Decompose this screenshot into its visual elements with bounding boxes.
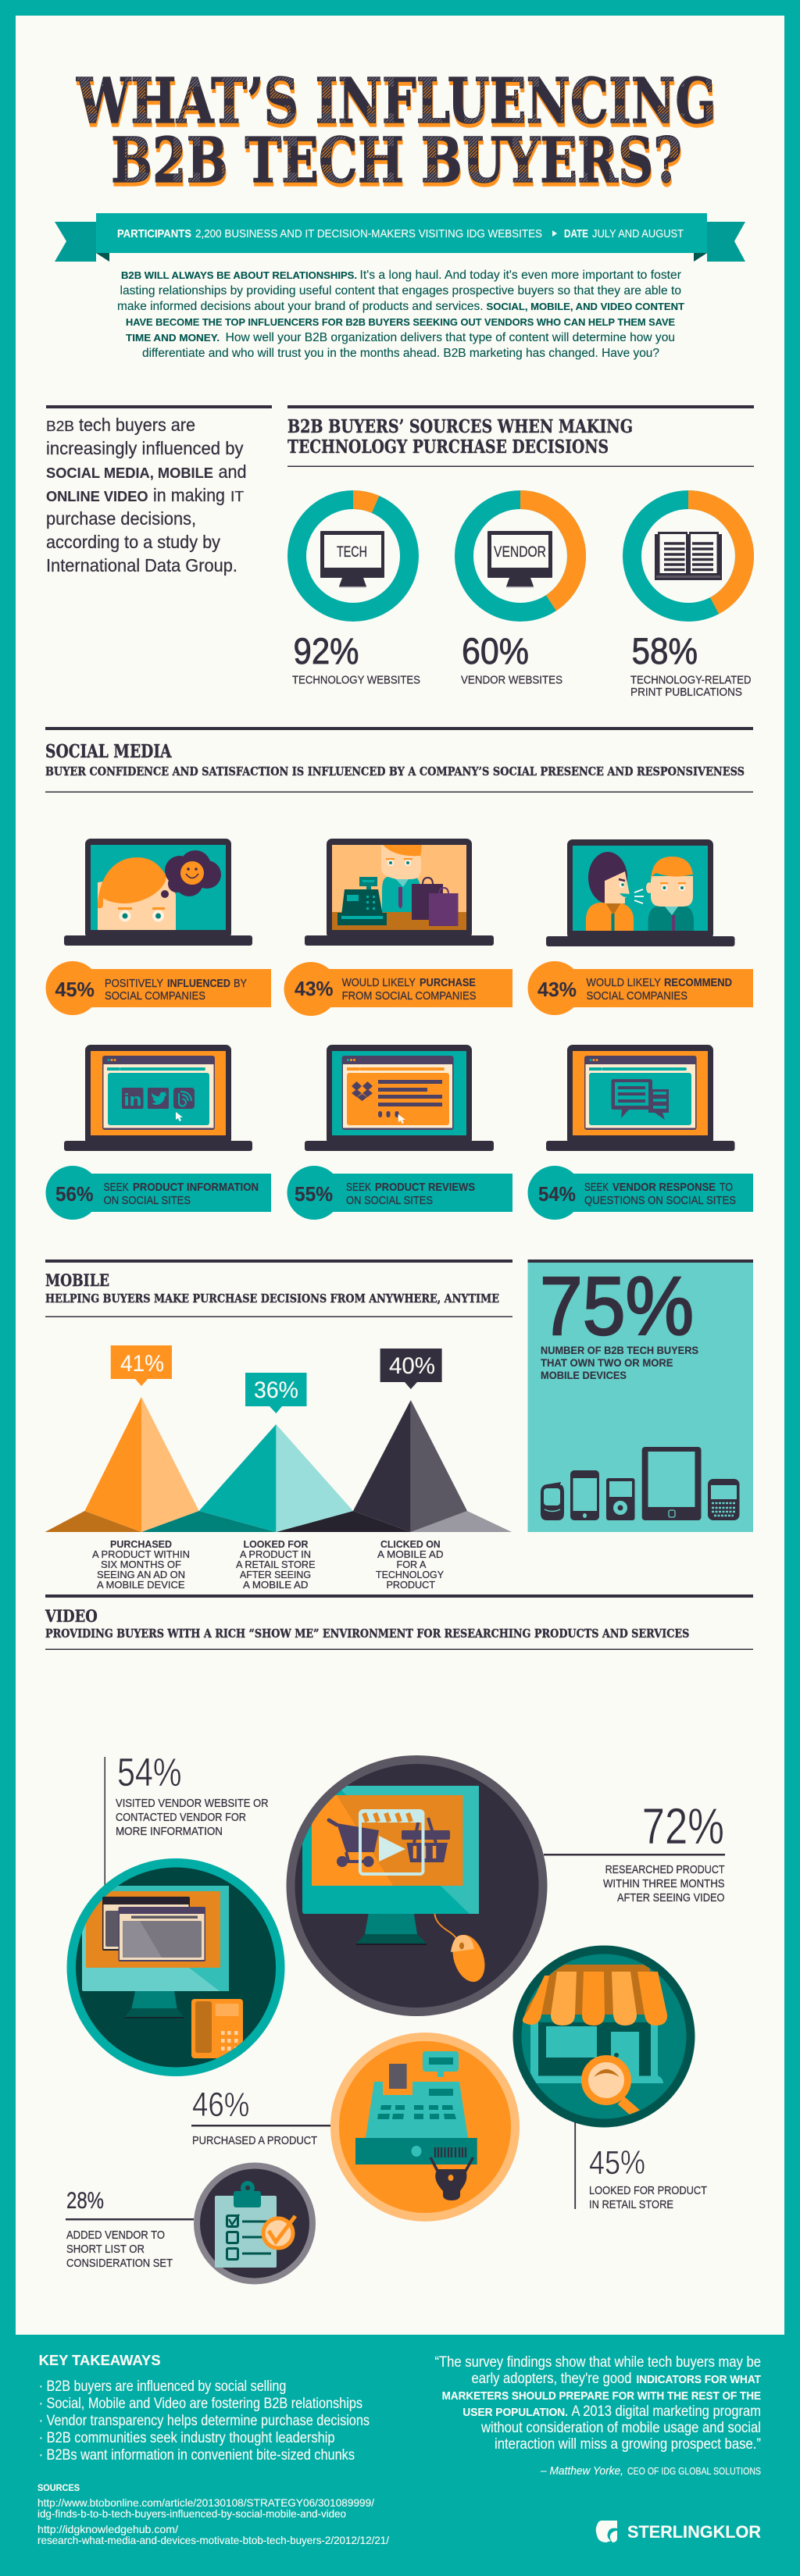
text block: sources — [38, 2482, 389, 2546]
rule: intro column — [46, 405, 272, 408]
icon: open book — [655, 532, 722, 580]
stat bar: 55%: ON SOCIAL SITES — [346, 1194, 433, 1207]
rule: sources column — [288, 405, 754, 408]
stat bar: 45%: POSITIVELY — [105, 977, 163, 990]
callout: 40%: 40% — [389, 1353, 435, 1379]
intro paragraph: lasting relationships by providing useful content that engages prospective buyers so that they are able to — [120, 284, 681, 298]
label: purchased: A MOBILE DEVICE — [97, 1579, 185, 1591]
circle: retail store — [512, 1946, 695, 2127]
panel: key takeaways: · B2Bs want information in convenient bite-sized chunks — [39, 2446, 355, 2464]
callout: quote: MARKETERS SHOULD PREPARE FOR WITH THE REST OF THE — [442, 2389, 761, 2403]
leader line: 72% — [544, 1854, 725, 1855]
circle: video monitor — [286, 1755, 547, 2016]
panel: key takeaways: KEY TAKEAWAYS — [39, 2353, 161, 2368]
label: looked for: A MOBILE AD — [243, 1579, 308, 1591]
icon: video window — [360, 1811, 423, 1874]
icon: keyboard phone — [708, 1479, 739, 1520]
panel: 75% mobile devices: NUMBER OF B2B TECH BUYERS — [541, 1345, 698, 1356]
stat bar: 43% recommend — [528, 961, 753, 1015]
icon: awning — [523, 1972, 667, 2026]
stat: 92%: 92% — [294, 630, 359, 672]
label: clicked on: A MOBILE AD — [377, 1548, 444, 1560]
text block: study summary: SOCIAL MEDIA, MOBILE — [46, 465, 213, 481]
stat bar: 56%: ON SOCIAL SITES — [104, 1194, 191, 1207]
icon: barcode scanner — [430, 2157, 473, 2200]
stat: 58% — [630, 630, 752, 699]
icon: monitor tech — [320, 531, 384, 587]
callout: 36%: 36% — [254, 1377, 298, 1403]
callout: quote: interaction will miss a growing prospect base.” — [495, 2436, 761, 2453]
text block: study summary — [46, 415, 247, 575]
stat bar: 43% purchase: FROM SOCIAL COMPANIES — [342, 989, 477, 1003]
stat bar: 54%: TO — [720, 1181, 733, 1194]
stat: 46%: 46% — [192, 2086, 249, 2124]
icon: tablet — [642, 1447, 702, 1520]
label: purchased — [92, 1538, 190, 1591]
stat bar: 54%: QUESTIONS ON SOCIAL SITES — [584, 1194, 736, 1207]
circle: vendor monitor and phone — [67, 1858, 284, 2076]
text block: study summary: tech buyers are — [79, 415, 195, 435]
stat bar: 43% recommend: 43% — [538, 978, 577, 1001]
text block: study summary: increasingly influenced by — [46, 438, 244, 458]
label: looked for: A RETAIL STORE — [236, 1559, 316, 1570]
heading: sources — [288, 416, 633, 458]
icon: shopping basket — [402, 1818, 450, 1862]
stat: 45%: IN RETAIL STORE — [589, 2198, 673, 2211]
icon: cursor — [398, 1114, 405, 1124]
text block: sources: idg-finds-b-to-b-tech-buyers-influenced-by-social-mobile-and-video — [38, 2507, 346, 2520]
callout: 41%: 41% — [120, 1351, 164, 1377]
icon: cursor — [176, 1112, 183, 1121]
icon: monitor tech: TECH — [337, 544, 367, 561]
text block: sources: SOURCES — [38, 2482, 80, 2493]
heading: mobile: MOBILE — [45, 1270, 109, 1290]
stat bar: 43% purchase — [284, 962, 512, 1016]
icon: monitor vendor: VENDOR — [494, 544, 546, 561]
ribbon banner: participants and date: PARTICIPANTS — [117, 227, 191, 240]
stat bar: 45%: 45% — [55, 978, 95, 1001]
label: looked for: AFTER SEEING — [240, 1569, 311, 1580]
stat: 72%: 72% — [642, 1797, 724, 1855]
intro paragraph: B2B WILL ALWAYS BE ABOUT RELATIONSHIPS. — [121, 269, 357, 281]
label: purchased: SEEING AN AD ON — [97, 1569, 185, 1580]
label: clicked on — [376, 1538, 444, 1591]
panel: 75% mobile devices — [528, 1260, 753, 1532]
laptop: chat browser — [546, 1045, 734, 1151]
stat: 72%: WITHIN THREE MONTHS — [603, 1877, 725, 1890]
callout: quote: early adopters, they're good — [472, 2371, 631, 2387]
icon: shopping cart — [329, 1820, 379, 1867]
heading: mobile — [45, 1270, 499, 1306]
laptop: social icons browser — [64, 1045, 252, 1151]
callout: 40% — [380, 1349, 442, 1389]
leader line: 46% — [191, 2125, 330, 2127]
heading: video: PROVIDING BUYERS WITH A RICH “SHOW ME” ENVIRONMENT FOR RESEARCHING PRODUCTS AND SERVICES — [45, 1626, 689, 1641]
icon: dropbox — [352, 1081, 373, 1101]
panel: key takeaways: · B2B communities seek industry thought leadership — [39, 2429, 335, 2446]
laptop: conversation — [546, 839, 734, 946]
callout: quote: “The survey findings show that while tech buyers may be — [434, 2354, 761, 2371]
intro paragraph: TIME AND MONEY. — [126, 332, 220, 344]
heading: sources: B2B BUYERS’ SOURCES WHEN MAKING — [288, 416, 633, 437]
stat: 28%: ADDED VENDOR TO — [66, 2229, 165, 2242]
callout: quote: A 2013 digital marketing program — [572, 2403, 761, 2420]
icon: magnifier — [584, 2058, 639, 2116]
panel: key takeaways: · B2B buyers are influenced by social selling — [39, 2378, 286, 2395]
icon: smartphone — [570, 1470, 599, 1520]
text lines — [378, 1082, 442, 1104]
panel: 75% mobile devices: MOBILE DEVICES — [541, 1370, 627, 1381]
stat: 45%: 45% — [589, 2144, 645, 2182]
intro paragraph: make informed decisions about your brand of products and services. — [117, 300, 483, 313]
stat bar: 43% purchase: PURCHASE — [420, 976, 476, 989]
stat: 28% — [66, 2188, 173, 2270]
icon: mouse — [434, 1914, 491, 1986]
stat bar: 45%: INFLUENCED — [167, 977, 230, 990]
heading: video: VIDEO — [45, 1606, 98, 1626]
icon: blogger rss — [173, 1088, 195, 1109]
label: purchased: SIX MONTHS OF — [101, 1559, 181, 1570]
stat bar: 56% — [45, 1166, 271, 1220]
stat: 60% — [461, 630, 562, 687]
callout: quote: – Matthew Yorke, — [540, 2464, 623, 2478]
text block: study summary: according to a study by — [46, 532, 220, 552]
leader line: 28% — [66, 2218, 194, 2221]
chart: mountain peaks — [45, 1397, 512, 1532]
stat: 58%: TECHNOLOGY-RELATED — [630, 673, 752, 687]
panel: key takeaways: · Social, Mobile and Video are fostering B2B relationships — [39, 2395, 362, 2412]
stat bar: 43% purchase: 43% — [295, 977, 333, 1000]
leader line: 45% — [574, 2122, 576, 2209]
text block: study summary: purchase decisions, — [46, 508, 196, 529]
intro paragraph: HAVE BECOME THE TOP INFLUENCERS FOR B2B BUYERS SEEKING OUT VENDORS WHO CAN HELP THEM SAVE — [126, 316, 675, 328]
logo: sterlingklor: STERLINGKLOR — [627, 2522, 761, 2542]
icon: linkedin — [122, 1088, 144, 1110]
stat: 45% — [589, 2144, 707, 2211]
stat: 60%: VENDOR WEBSITES — [461, 673, 562, 687]
icon: linkedin: in — [123, 1090, 142, 1110]
stat: 72%: AFTER SEEING VIDEO — [617, 1891, 725, 1904]
callout: quote: USER POPULATION. — [462, 2406, 568, 2419]
stat: 28%: 28% — [66, 2188, 104, 2214]
callout: 36% — [245, 1373, 306, 1413]
stat bar: 55%: SEEK — [346, 1181, 371, 1194]
ribbon banner: participants and date: 2,200 BUSINESS AND IT DECISION-MAKERS VISITING IDG WEBSITES — [195, 227, 542, 240]
stat: 28%: CONSIDERATION SET — [66, 2257, 173, 2270]
text block: sources: http://www.btobonline.com/article/20130108/STRATEGY06/301089999/ — [38, 2496, 374, 2509]
intro paragraph: differentiate and who will trust you in the months ahead. B2B marketing has changed. Have you? — [142, 347, 659, 360]
donut chart: technology websites 92% — [297, 500, 409, 612]
callout: quote: without consideration of mobile usage and social — [480, 2420, 761, 2436]
laptop: dropbox browser — [305, 1045, 494, 1151]
heading: mobile: HELPING BUYERS MAKE PURCHASE DECISIONS FROM ANYWHERE, ANYTIME — [45, 1292, 499, 1306]
icon: flip phone — [541, 1482, 564, 1520]
stat bar: 45%: BY — [234, 977, 247, 990]
stat: 46% — [192, 2086, 317, 2147]
stat: 92%: TECHNOLOGY WEBSITES — [292, 673, 420, 687]
stat: 54%: CONTACTED VENDOR FOR — [116, 1811, 246, 1824]
laptop: store purchase — [305, 839, 494, 946]
stat bar: 54%: 54% — [538, 1182, 576, 1206]
donut chart: print publications 58% — [632, 500, 745, 612]
label: clicked on: PRODUCT — [386, 1579, 435, 1591]
donut chart: vendor websites 60% — [464, 500, 577, 612]
stat: 72%: RESEARCHED PRODUCT — [605, 1863, 725, 1876]
stat: 72% — [603, 1797, 725, 1904]
stat: 28%: SHORT LIST OR — [66, 2243, 145, 2256]
label: clicked on: FOR A — [397, 1559, 427, 1570]
circle: cash register — [330, 2033, 520, 2221]
label: purchased: PURCHASED — [110, 1538, 172, 1550]
label: clicked on: CLICKED ON — [380, 1538, 441, 1550]
icon: chat bubbles — [611, 1079, 669, 1120]
stat bar: 54%: SEEK — [584, 1181, 609, 1194]
label: looked for — [236, 1538, 316, 1591]
ribbon banner: participants and date: DATE — [564, 227, 588, 240]
stat bar: 54% — [528, 1166, 753, 1220]
stat: 54%: VISITED VENDOR WEBSITE OR — [116, 1797, 269, 1810]
circle: checklist — [194, 2163, 316, 2285]
text block: study summary: ONLINE VIDEO — [46, 489, 148, 504]
stat bar: 56%: SEEK — [104, 1181, 129, 1194]
stat bar: 43% purchase: WOULD LIKELY — [342, 976, 416, 989]
stat: 54%: MORE INFORMATION — [116, 1825, 223, 1838]
stat bar: 43% recommend: WOULD LIKELY — [586, 976, 661, 989]
icon: monitor vendor — [488, 531, 552, 587]
heading: sources: TECHNOLOGY PURCHASE DECISIONS — [288, 436, 609, 458]
stat bar: 43% recommend: RECOMMEND — [664, 976, 732, 989]
label: looked for: A PRODUCT IN — [240, 1548, 311, 1560]
stat: 54%: 54% — [117, 1750, 181, 1794]
label: clicked on: TECHNOLOGY — [376, 1569, 444, 1580]
icon: twitter — [148, 1088, 169, 1109]
stat: 54% — [116, 1750, 269, 1838]
stat: 46%: PURCHASED A PRODUCT — [192, 2134, 317, 2147]
callout: quote: CEO OF IDG GLOBAL SOLUTIONS — [627, 2466, 761, 2477]
ribbon banner: participants and date: JULY AND AUGUST — [592, 227, 684, 240]
panel: key takeaways — [39, 2353, 370, 2464]
stat bar: 56%: PRODUCT INFORMATION — [133, 1181, 259, 1194]
stat bar: 45%: SOCIAL COMPANIES — [105, 989, 205, 1003]
heading: social media: SOCIAL MEDIA — [45, 741, 172, 762]
stat: 45%: LOOKED FOR PRODUCT — [589, 2184, 707, 2197]
stat bar: 54%: VENDOR RESPONSE — [612, 1181, 716, 1194]
dots — [380, 1113, 397, 1115]
text block: study summary: B2B — [46, 419, 74, 434]
icon: music player — [606, 1478, 634, 1520]
label: looked for: LOOKED FOR — [244, 1538, 309, 1550]
panel: 75% mobile devices: 75% — [540, 1260, 694, 1352]
text block: study summary: and — [219, 461, 247, 482]
stat bar: 43% recommend: SOCIAL COMPANIES — [586, 989, 688, 1003]
stat bar: 45% — [45, 961, 271, 1015]
icon: browser windows — [102, 1897, 205, 1961]
text block: sources: research-what-media-and-devices-motivate-btob-tech-buyers-2/2012/12/21/ — [38, 2534, 389, 2546]
callout: 41% — [111, 1345, 172, 1386]
icon: monitor stand — [356, 1914, 427, 1945]
stat: 60%: 60% — [462, 630, 529, 672]
label: purchased: A PRODUCT WITHIN — [92, 1548, 190, 1560]
intro paragraph — [117, 269, 684, 360]
ribbon banner: participants and date — [55, 213, 745, 262]
laptop: thought bubble — [64, 839, 252, 946]
intro paragraph: SOCIAL, MOBILE, AND VIDEO CONTENT — [486, 301, 684, 312]
title — [76, 64, 717, 201]
intro paragraph: How well your B2B organization delivers that type of content will determine how you — [226, 331, 675, 344]
intro paragraph: It's a long haul. And today it's even more important to foster — [359, 269, 681, 282]
callout: quote — [434, 2354, 761, 2478]
stat: 58%: PRINT PUBLICATIONS — [630, 686, 742, 699]
text block: study summary: in making — [153, 485, 225, 505]
panel: 75% mobile devices: THAT OWN TWO OR MORE — [541, 1357, 673, 1369]
stat bar: 55%: 55% — [295, 1182, 333, 1206]
stat: 92% — [292, 630, 420, 687]
text block: sources: http://idgknowledgehub.com/ — [38, 2523, 178, 2535]
stat: 58%: 58% — [631, 630, 698, 672]
panel: key takeaways: · Vendor transparency helps determine purchase decisions — [39, 2412, 370, 2429]
text block: study summary: International Data Group. — [46, 555, 238, 575]
heading: video — [45, 1606, 689, 1641]
icon: check badge — [263, 2216, 295, 2248]
stat bar: 55%: PRODUCT REVIEWS — [375, 1181, 475, 1194]
heading: social media — [45, 741, 745, 779]
stat bar: 55% — [288, 1166, 512, 1220]
callout: quote: INDICATORS FOR WHAT — [636, 2373, 761, 2386]
stat bar: 56%: 56% — [55, 1182, 94, 1206]
text block: study summary: IT — [230, 489, 244, 504]
